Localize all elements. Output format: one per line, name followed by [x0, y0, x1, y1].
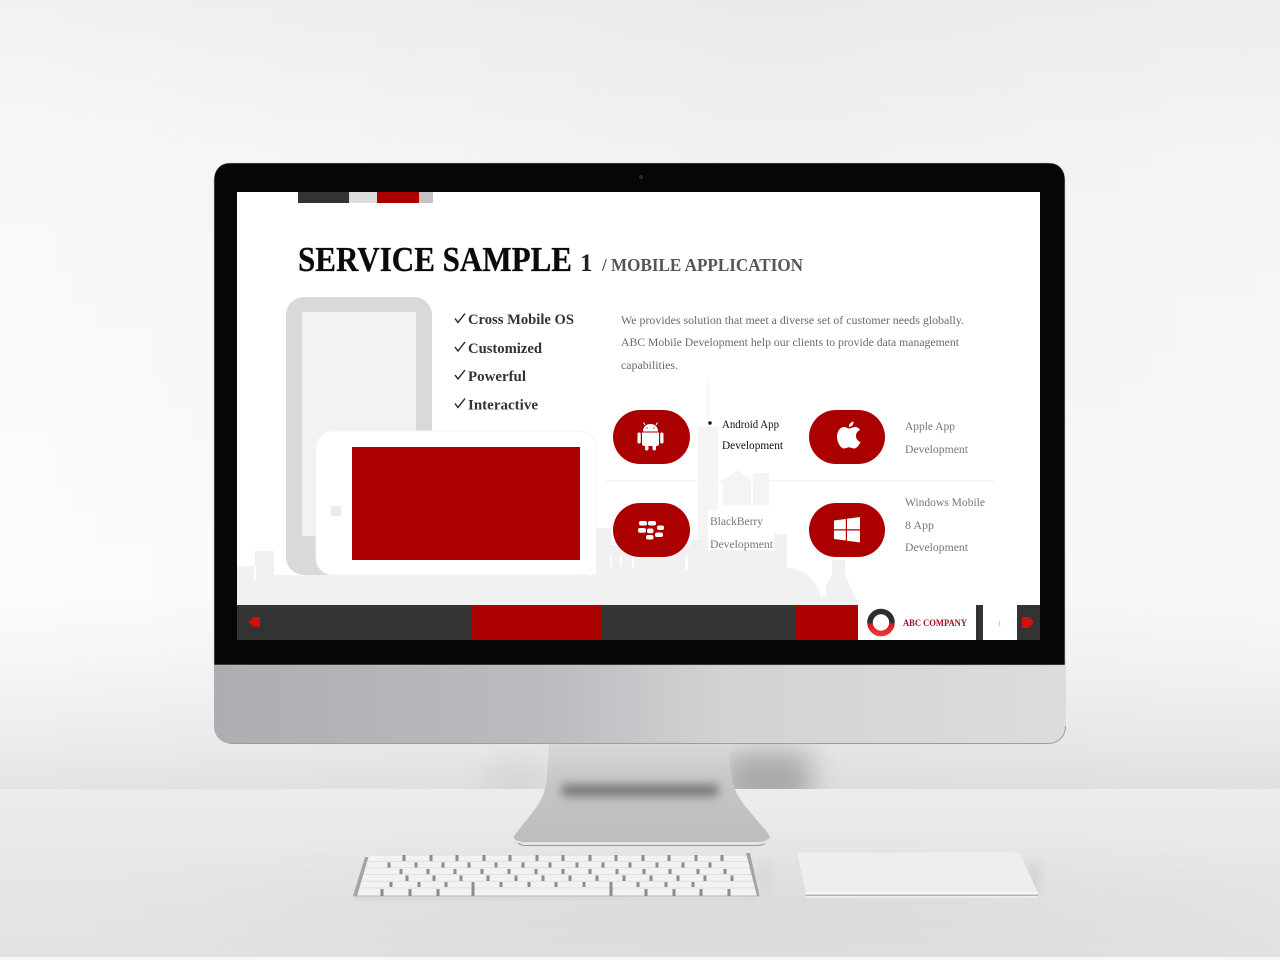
feature checklist: [455, 312, 574, 414]
monitor bezel: [214, 163, 1065, 665]
keyboard: [353, 853, 760, 901]
label: blackberry: Development: [710, 539, 774, 551]
label: windows: [905, 497, 985, 554]
label: blackberry: [710, 516, 774, 551]
trackpad: [797, 852, 1038, 898]
footer bar: [237, 605, 1040, 640]
screen: slide: [237, 192, 1040, 640]
service: blackberry: [613, 503, 690, 557]
service: apple: [809, 410, 885, 464]
label: apple: Development: [905, 444, 969, 456]
intro paragraph: ABC Mobile Development help our clients to provide data management: [621, 337, 960, 349]
monitor stand: [514, 744, 770, 846]
feature checklist: Interactive: [468, 398, 538, 414]
title: / MOBILE APPLICATION: [601, 255, 803, 275]
city skyline silhouette: [237, 382, 858, 605]
label: android: [708, 419, 784, 452]
page number: 1: [998, 620, 1002, 628]
label: apple: Apple App: [905, 421, 955, 433]
service divider: [606, 480, 994, 482]
title: SERVICE SAMPLE: [298, 240, 572, 279]
label: windows: Windows Mobile: [905, 497, 985, 509]
service: windows: [809, 503, 885, 557]
next arrow: [1022, 617, 1034, 628]
feature checklist: Cross Mobile OS: [468, 312, 574, 328]
service: android: [613, 410, 690, 464]
label: android: Development: [722, 440, 784, 452]
top colour strips: [298, 192, 433, 203]
label: android: Android App: [722, 419, 779, 431]
monitor chin: [214, 660, 1066, 744]
intro paragraph: [621, 315, 964, 372]
label: windows: 8 App: [905, 520, 934, 532]
feature checklist: Customized: [468, 341, 543, 357]
previous arrow: [248, 617, 260, 627]
title: 1: [580, 250, 592, 277]
label: windows: Development: [905, 542, 969, 554]
intro paragraph: We provides solution that meet a diverse set of customer needs globally.: [621, 315, 964, 327]
title: [298, 240, 803, 279]
company logo: [870, 612, 967, 634]
label: apple: [905, 421, 969, 456]
label: blackberry: BlackBerry: [710, 516, 763, 528]
tablet illustration: [316, 431, 596, 575]
feature checklist: Powerful: [468, 369, 526, 385]
company logo: ABC COMPANY: [903, 618, 967, 628]
intro paragraph: capabilities.: [621, 360, 678, 372]
phone illustration: [286, 297, 432, 575]
